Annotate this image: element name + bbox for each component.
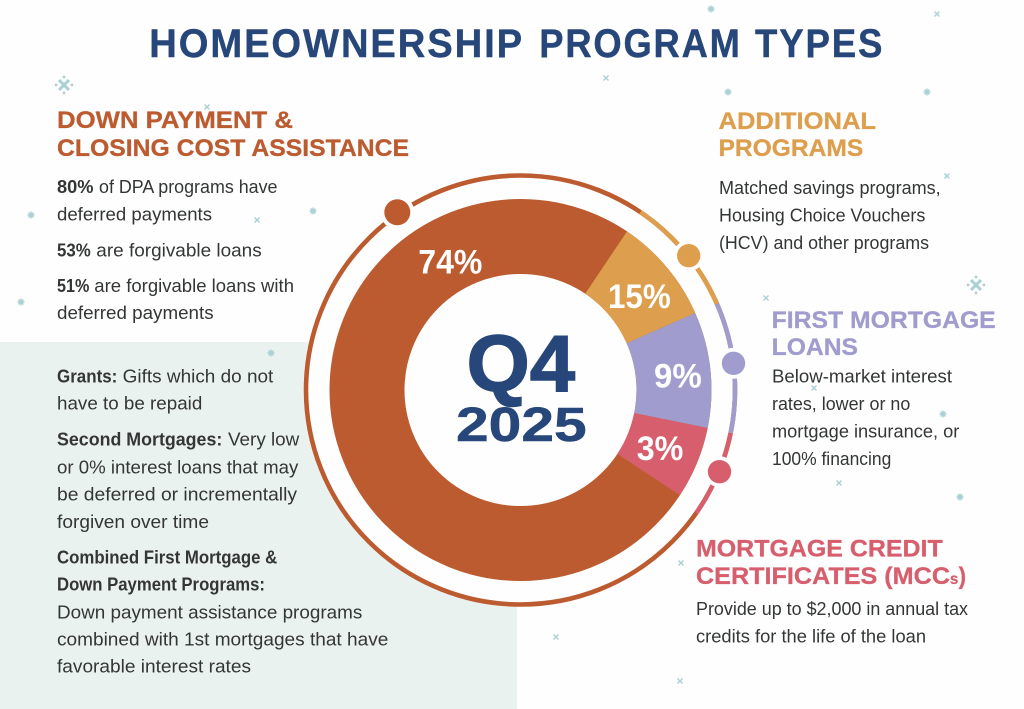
- outer ring segments: [306, 176, 735, 604]
- text block: first mortgage description: [772, 367, 959, 469]
- definition: second mortgages: Second Mortgages:: [57, 430, 222, 450]
- definition: combined first mortgage and down payment programs: Down Payment Programs:: [57, 575, 265, 595]
- marker: orange dot: [380, 195, 414, 229]
- text block: first mortgage description: Below-market interest: [772, 367, 952, 387]
- heading: down payment and closing cost assistance: CLOSING COST ASSISTANCE: [57, 135, 409, 162]
- heading: mortgage credit certificates: s: [950, 571, 958, 588]
- title: PROGRAM: [539, 22, 742, 66]
- heading: mortgage credit certificates: ): [959, 563, 966, 590]
- center label: Q4: Q4: [467, 319, 576, 408]
- text block: down payment statistics: deferred payments: [57, 204, 212, 224]
- heading: first mortgage loans: [772, 307, 996, 361]
- text block: additional programs description: [719, 178, 941, 253]
- label: 74%: 74%: [418, 243, 482, 281]
- text block: down payment statistics: 51%: [57, 276, 89, 296]
- title: [149, 22, 884, 66]
- text block: mortgage credit description: Provide up to $2,000 in annual tax: [696, 599, 968, 619]
- title: HOMEOWNERSHIP: [149, 22, 524, 66]
- marker: yellow dot: [673, 240, 704, 271]
- text block: additional programs description: (HCV) and other programs: [719, 233, 929, 253]
- panel: mortgage credit certificates: [696, 536, 968, 646]
- definition: combined first mortgage and down payment programs: combined with 1st mortgages that have: [57, 630, 388, 650]
- definition: grants: Grants:: [57, 366, 117, 386]
- definition: second mortgages: Very low: [228, 430, 300, 450]
- chart: donut with outer ring: [304, 173, 749, 607]
- definition: combined first mortgage and down payment programs: Combined First Mortgage &: [57, 547, 277, 567]
- panel: down payment and closing cost assistance: [57, 107, 409, 323]
- text block: mortgage credit description: credits for the life of the loan: [696, 626, 926, 646]
- text block: down payment statistics: deferred payments: [57, 303, 214, 323]
- center label: 2025: 2025: [456, 399, 587, 452]
- definition: combined first mortgage and down payment programs: [57, 547, 388, 677]
- definition: second mortgages: be deferred or incrementally: [57, 485, 297, 505]
- definition: grants: [57, 366, 273, 414]
- definition: grants: have to be repaid: [57, 394, 202, 414]
- panel: program definitions background: [0, 342, 517, 709]
- heading: mortgage credit certificates: MORTGAGE CREDIT: [696, 536, 943, 563]
- panel: first mortgage loans: [772, 307, 996, 469]
- definition: second mortgages: [57, 430, 300, 532]
- definition: grants: Gifts which do not: [123, 366, 273, 386]
- text block: down payment statistics: 80%: [57, 177, 94, 197]
- text block: down payment statistics: are forgivable loans: [96, 241, 262, 261]
- heading: mortgage credit certificates: [696, 536, 966, 590]
- heading: down payment and closing cost assistance: DOWN PAYMENT &: [57, 107, 293, 134]
- heading: mortgage credit certificates: CERTIFICATES (MCC: [696, 563, 950, 590]
- definition: second mortgages: or 0% interest loans that may: [57, 457, 298, 477]
- heading: additional programs: PROGRAMS: [718, 135, 863, 162]
- text block: additional programs description: Housing Choice Vouchers: [719, 206, 925, 226]
- heading: additional programs: ADDITIONAL: [718, 108, 876, 135]
- text block: down payment statistics: of DPA programs have: [99, 177, 278, 197]
- donut slices: [367, 236, 674, 544]
- label: 3%: 3%: [637, 430, 683, 468]
- heading: first mortgage loans: FIRST MORTGAGE: [772, 307, 996, 334]
- marker: red dot: [704, 456, 735, 487]
- text block: down payment statistics: are forgivable loans with: [94, 276, 294, 296]
- text block: program definitions: [57, 366, 388, 677]
- text block: down payment statistics: 53%: [57, 241, 91, 261]
- text block: down payment statistics: [57, 177, 294, 323]
- text block: first mortgage description: mortgage insurance, or: [772, 421, 959, 441]
- definition: combined first mortgage and down payment programs: Down payment assistance programs: [57, 602, 362, 622]
- icon: snowflake left: [55, 76, 73, 94]
- title: TYPES: [755, 22, 884, 66]
- icon: snowflake right: [967, 276, 985, 294]
- label: 15%: 15%: [608, 278, 671, 316]
- text block: additional programs description: Matched savings programs,: [719, 178, 941, 198]
- marker: purple dot: [718, 348, 749, 379]
- text block: mortgage credit description: [696, 599, 968, 646]
- definition: combined first mortgage and down payment programs: favorable interest rates: [57, 657, 251, 677]
- definition: second mortgages: forgiven over time: [57, 512, 209, 532]
- heading: additional programs: [718, 108, 876, 162]
- label: 9%: 9%: [654, 358, 702, 396]
- text block: first mortgage description: rates, lower or no: [772, 394, 910, 414]
- heading: down payment and closing cost assistance: [57, 107, 409, 162]
- text block: first mortgage description: 100% financing: [772, 449, 891, 469]
- panel: additional programs: [718, 108, 941, 253]
- heading: first mortgage loans: LOANS: [772, 334, 858, 361]
